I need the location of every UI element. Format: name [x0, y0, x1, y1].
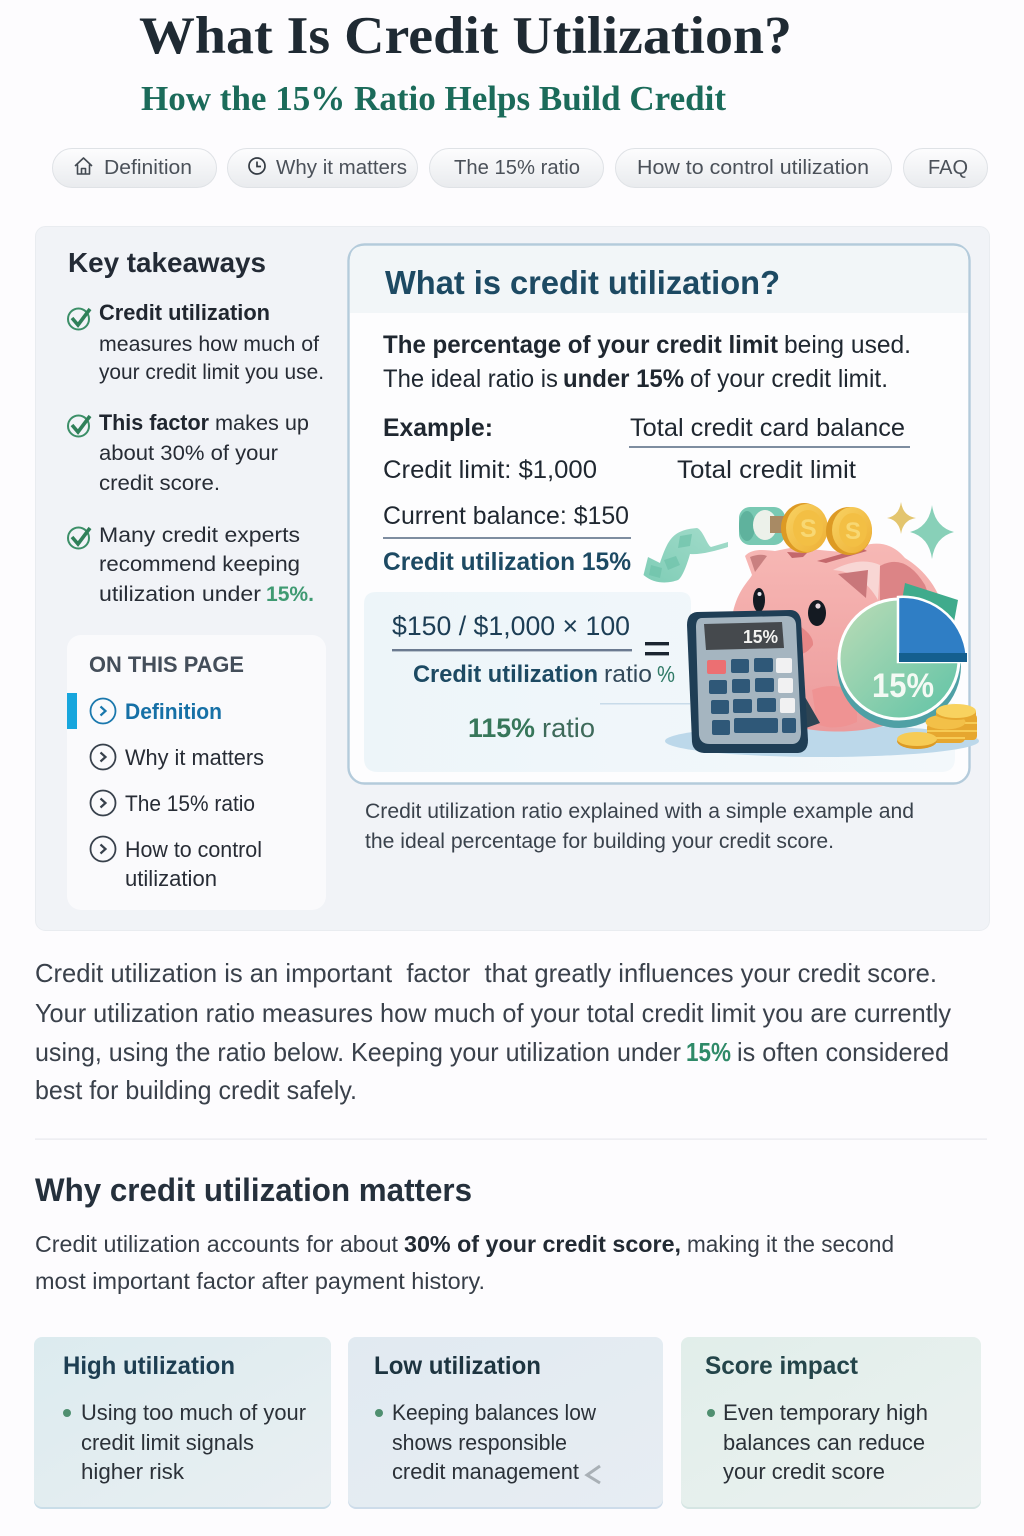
panel: what is credit utilization [348, 244, 979, 784]
icon: calculator: 15% [743, 627, 778, 647]
takeaway 1: your credit limit you use. [99, 360, 324, 384]
intro paragraph: using, using the ratio below. Keeping your utilization under [35, 1037, 681, 1067]
example values: Credit limit: $1,000 [383, 456, 597, 484]
icon: piggy bank [733, 544, 945, 732]
pill: FAQ: FAQ [928, 157, 968, 179]
pill: FAQ [904, 148, 988, 188]
heading: key takeaways: Key takeaways [68, 247, 266, 278]
pill: How to control utilization: How to control utilization [637, 157, 869, 179]
ground shadow [665, 725, 979, 757]
pill: Definition [52, 148, 216, 188]
example values: Example: [383, 414, 493, 442]
definition text: being used. [784, 331, 911, 359]
caption [365, 800, 914, 853]
formula box: Credit utilization [413, 661, 598, 688]
chart: 15% pie: 15% [872, 667, 934, 705]
card: high utilization: Using too much of your [81, 1400, 306, 1425]
takeaway 2: makes up [215, 411, 309, 435]
formula box: ratio [604, 661, 652, 688]
panel: key takeaways and definition [36, 226, 990, 930]
link: How to control utilization [90, 836, 262, 891]
pill: How to control utilization [616, 148, 892, 188]
icon: coin stack [897, 704, 977, 749]
intro paragraph [35, 958, 951, 1105]
formula box: % [657, 661, 675, 687]
why it matters text: 30% of your credit score, [404, 1231, 681, 1257]
card: score impact [681, 1337, 981, 1509]
link: How to control utilization: utilization [125, 866, 217, 891]
card: low utilization [348, 1337, 663, 1509]
pill: Definition: Definition [104, 157, 192, 179]
card: low utilization: Keeping balances low [392, 1400, 596, 1425]
card: score impact: Even temporary high [723, 1400, 928, 1425]
takeaway 3 [68, 523, 314, 606]
caption: Credit utilization ratio explained with a simple example and [365, 800, 914, 823]
why it matters text: Credit utilization accounts for about [35, 1231, 399, 1257]
formula box: ratio [542, 713, 595, 743]
example values: Credit utilization 15% [383, 548, 631, 576]
link: Definition: Definition [125, 699, 222, 724]
takeaway 3: 15%. [266, 582, 314, 606]
card: high utilization: higher risk [81, 1459, 185, 1484]
chart: 15% pie [837, 583, 967, 728]
icon: left chevron [587, 1466, 600, 1483]
card: high utilization: High utilization [63, 1352, 235, 1380]
caption: the ideal percentage for building your credit score. [365, 830, 834, 853]
fraction: balance over limit: Total credit limit [677, 456, 856, 484]
link: Why it matters: Why it matters [125, 745, 264, 770]
heading: on this page: ON THIS PAGE [89, 652, 244, 677]
pill: The 15% ratio [430, 148, 604, 188]
intro paragraph: best for building credit safely. [35, 1075, 357, 1105]
takeaway 1: Credit utilization [99, 300, 270, 325]
definition text: under 15% [563, 365, 684, 393]
definition text: The percentage of your credit limit [383, 331, 779, 359]
link: How to control utilization: How to control [125, 837, 262, 862]
icon: gold coins [781, 503, 872, 555]
intro paragraph: is often considered [737, 1037, 949, 1067]
active marker [67, 693, 77, 729]
why it matters text: most important factor after payment history. [35, 1268, 485, 1294]
intro paragraph: Your utilization ratio measures how much of your total credit limit you are currently [35, 998, 951, 1028]
why it matters text [35, 1231, 894, 1294]
card: score impact: your credit score [723, 1459, 885, 1484]
icon: gold coins: S [845, 518, 861, 545]
heading: why credit utilization matters: Why credit utilization matters [35, 1172, 472, 1208]
card: low utilization: shows responsible [392, 1430, 567, 1455]
card: score impact: balances can reduce [723, 1430, 925, 1455]
subtitle: How the 15% Ratio Helps Build Credit [141, 79, 726, 118]
fraction: balance over limit: Total credit card balance [630, 414, 905, 442]
takeaway 2: This factor [99, 410, 209, 435]
formula box [364, 592, 955, 772]
why it matters text: making it the second [687, 1231, 894, 1257]
example values [383, 414, 631, 576]
formula box: $150 / $1,000 × 100 [392, 611, 630, 641]
definition text: of your credit limit. [690, 365, 888, 393]
panel: on this page [67, 635, 326, 910]
card: low utilization: Low utilization [374, 1352, 541, 1380]
intro paragraph: Credit utilization is an important factor that greatly influences your credit score. [35, 958, 937, 988]
illustration: piggy bank, calculator, pie chart and coins [644, 502, 979, 757]
takeaway 3: Many credit experts [99, 523, 300, 547]
card: high utilization [34, 1337, 331, 1509]
icon: sparkles [887, 502, 954, 559]
card: score impact: Score impact [705, 1352, 859, 1380]
fraction: balance over limit [629, 414, 910, 484]
icon: banknote roll [739, 507, 785, 545]
takeaway 2: credit score. [99, 471, 220, 495]
example values: Current balance: $150 [383, 502, 629, 530]
card: low utilization: credit management [392, 1459, 579, 1484]
takeaway 2: about 30% of your [99, 441, 278, 465]
icon: flying banknote [644, 528, 728, 582]
takeaway 2 [68, 410, 309, 495]
icon: gold coins: S [800, 515, 817, 543]
takeaway 1 [68, 300, 324, 384]
pill: Why it matters [228, 148, 418, 188]
intro paragraph: 15% [686, 1037, 731, 1067]
card heading: What is credit utilization? [385, 264, 780, 301]
title: What Is Credit Utilization? [139, 7, 792, 65]
pill: The 15% ratio: The 15% ratio [454, 157, 580, 179]
takeaway 3: utilization under [99, 582, 261, 606]
card: high utilization: credit limit signals [81, 1430, 254, 1455]
definition text [383, 331, 911, 393]
formula box: 115% [468, 713, 535, 743]
takeaway 1: measures how much of [99, 332, 319, 356]
takeaway 3: recommend keeping [99, 552, 300, 576]
link: The 15% ratio: The 15% ratio [125, 791, 255, 816]
pill: Why it matters: Why it matters [276, 157, 407, 179]
definition text: The ideal ratio is [383, 365, 558, 393]
navigation pills [52, 148, 988, 188]
icon: calculator [687, 610, 808, 753]
